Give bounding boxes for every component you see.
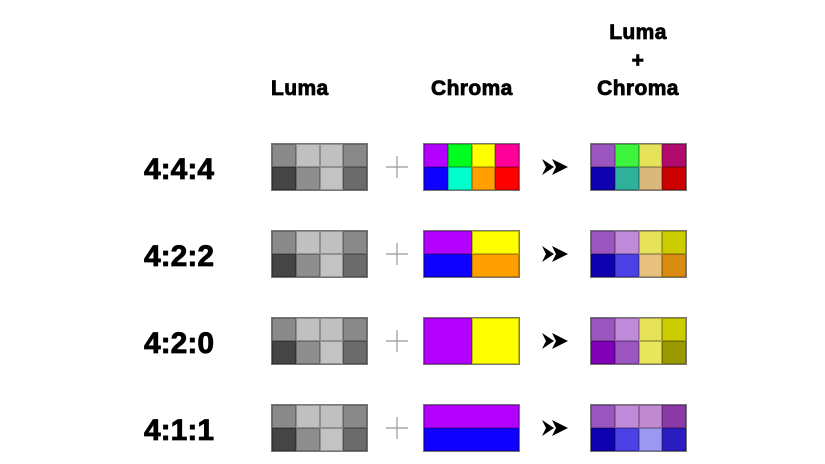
result grid 4:4:4 (590, 143, 687, 191)
luma grid row 2 (271, 230, 368, 278)
arrow row 1 (542, 159, 568, 175)
header: Chroma: Chroma (431, 77, 513, 100)
chroma grid 4:1:1 (423, 404, 520, 452)
luma grid row 3 (271, 317, 368, 365)
row label 4:1:1: 4:1:1 (144, 414, 214, 447)
plus icon row 1 (386, 156, 408, 178)
header: Luma + Chroma: Chroma (597, 77, 679, 100)
result grid 4:2:0 (590, 317, 687, 365)
arrow row 3 (542, 333, 568, 349)
plus icon row 4 (386, 417, 408, 439)
plus icon row 2 (386, 243, 408, 265)
luma grid row 4 (271, 404, 368, 452)
chroma grid 4:2:0 (423, 317, 520, 365)
header: Luma + Chroma: + (632, 49, 644, 72)
header: Luma + Chroma: Luma (609, 21, 667, 44)
arrow row 4 (542, 420, 568, 436)
chroma grid 4:4:4 (423, 143, 520, 191)
arrow row 2 (542, 246, 568, 262)
result grid 4:2:2 (590, 230, 687, 278)
luma grid row 1 (271, 143, 368, 191)
row label 4:4:4: 4:4:4 (144, 153, 214, 186)
header: Luma: Luma (271, 77, 329, 100)
row label 4:2:0: 4:2:0 (144, 327, 214, 360)
chroma grid 4:2:2 (423, 230, 520, 278)
result grid 4:1:1 (590, 404, 687, 452)
plus icon row 3 (386, 330, 408, 352)
row label 4:2:2: 4:2:2 (144, 240, 214, 273)
header: Luma + Chroma (597, 21, 679, 100)
